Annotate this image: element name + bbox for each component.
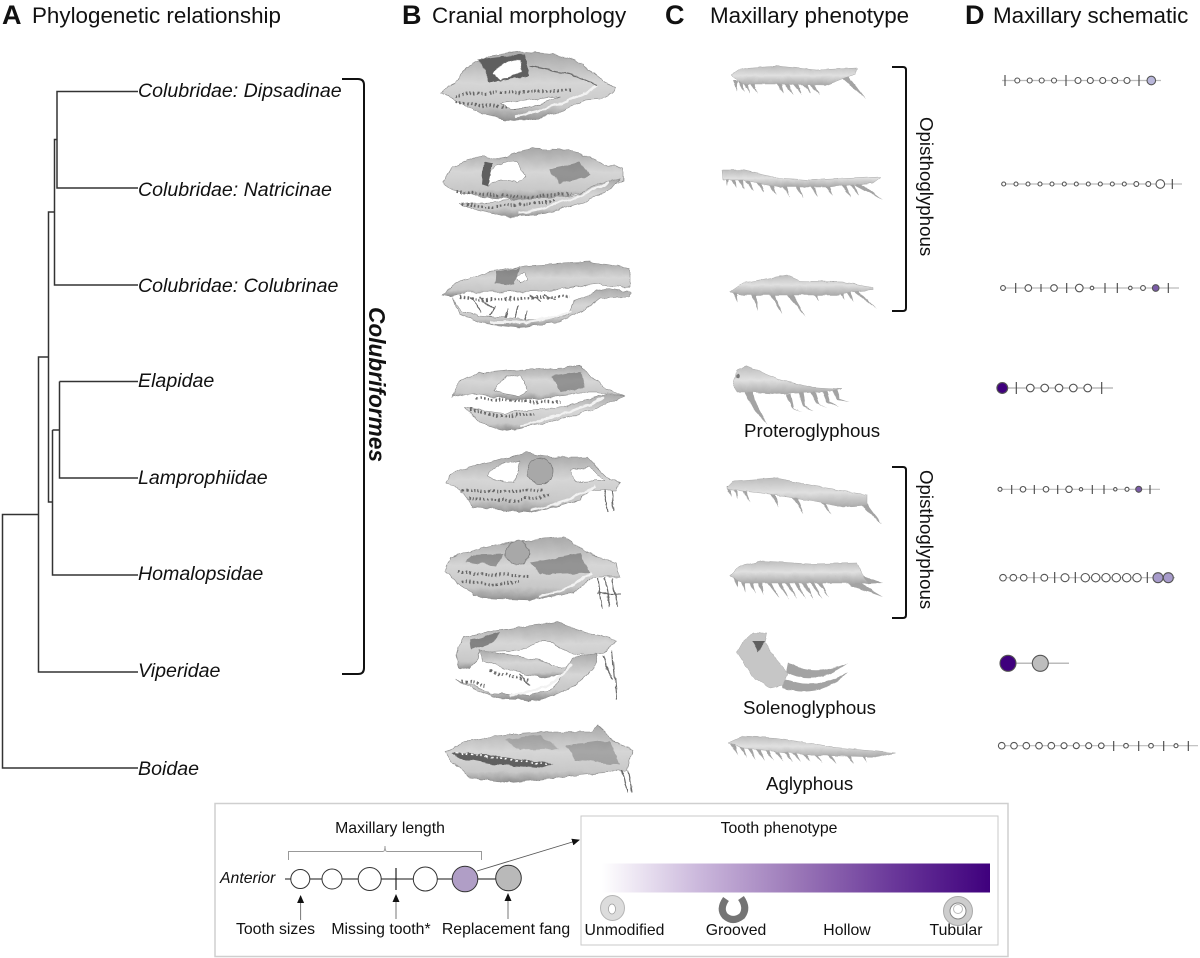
bracket: Colubriformes: [342, 79, 364, 674]
heading B: B: [402, 0, 422, 30]
maxilla: Viperidae: [737, 633, 848, 692]
heading B: Cranial morphology: [432, 3, 627, 28]
panel D: maxillary schematic: [965, 0, 1198, 751]
bracket: Opisthoglyphous upper: [892, 67, 906, 311]
panel B: cranial morphology: [402, 0, 633, 792]
example schematic: [285, 865, 521, 892]
skull: Lamprophiidae: [445, 453, 620, 513]
arrow: missing tooth: [395, 895, 397, 919]
icon: grooved tooth: [722, 898, 745, 920]
bracket: Opisthoglyphous lower: [892, 467, 906, 618]
skull: Viperidae: [455, 622, 617, 700]
brace: Maxillary length: [288, 846, 482, 860]
arrow: replacement fang: [507, 894, 509, 919]
label: Tooth sizes: Tooth sizes: [236, 921, 315, 938]
legend panel: [215, 804, 1008, 956]
label: Opisthoglyphous lower: Opisthoglyphous: [916, 470, 937, 609]
schematic: Boidae: [998, 741, 1198, 751]
schematic: Viperidae: [1000, 655, 1069, 671]
label: Missing tooth: Missing tooth*: [331, 921, 431, 938]
arrow: tooth sizes: [300, 896, 302, 920]
skull: Natricinae: [442, 149, 623, 217]
panel A: phylogenetic relationship: [2, 0, 390, 780]
maxilla: Boidae: [728, 736, 895, 764]
label: Hollow: Hollow: [823, 922, 871, 939]
skull: Dipsadinae: [441, 52, 615, 120]
label: Grooved: Grooved: [706, 922, 766, 939]
legend frame: [215, 804, 1008, 956]
icon: unmodified tooth: [600, 896, 624, 920]
Colubriformes label: Colubriformes: [364, 307, 390, 462]
maxilla: Elapidae: [733, 366, 849, 425]
label: Solenoglyphous: Solenoglyphous: [743, 697, 876, 718]
taxon labels: Homalopsidae: [138, 563, 263, 585]
icon: tubular tooth: [944, 896, 972, 926]
schematic: Homalopsidae: [999, 572, 1175, 583]
maxilla: Colubrinae: [730, 275, 877, 317]
label: Opisthoglyphous upper: Opisthoglyphous: [916, 117, 937, 256]
heading C: Maxillary phenotype: [710, 3, 909, 28]
taxon labels: Colubridae: Colubrinae: [138, 275, 339, 297]
schematic: Dipsadinae: [1002, 75, 1161, 86]
arrow to tooth phenotype: [477, 840, 579, 871]
phylogenetic tree: [2, 92, 138, 768]
maxilla: Natricinae: [722, 170, 883, 200]
schematic: Lamprophiidae: [998, 485, 1160, 494]
maxilla: Dipsadinae: [731, 66, 866, 99]
maxilla: Homalopsidae: [730, 561, 883, 600]
taxon labels: [138, 80, 342, 780]
label: Tooth phenotype: Tooth phenotype: [721, 820, 838, 837]
taxon labels: Colubridae: Dipsadinae: [138, 80, 342, 102]
heading D: Maxillary schematic: [993, 3, 1188, 28]
label: Unmodified: Unmodified: [585, 922, 664, 939]
taxon labels: Elapidae: [138, 370, 214, 392]
panel C: maxillary phenotype: [665, 0, 937, 794]
heading C: C: [665, 0, 684, 30]
skull: Homalopsidae: [445, 537, 620, 607]
taxon labels: Colubridae: Natricinae: [138, 179, 332, 201]
label: Tubular: Tubular: [930, 922, 982, 939]
heading D: D: [965, 0, 984, 30]
schematic: Colubrinae: [1000, 283, 1179, 293]
maxilla: Lamprophiidae: [726, 478, 882, 524]
label: Proteroglyphous: Proteroglyphous: [744, 420, 880, 441]
label: Anterior: Anterior: [219, 870, 276, 887]
label: Aglyphous: Aglyphous: [766, 773, 853, 794]
label: Replacement fang: Replacement fang: [442, 921, 570, 938]
schematic: Elapidae: [997, 382, 1113, 394]
tooth phenotype box: [581, 816, 998, 945]
taxon labels: Boidae: [138, 758, 199, 780]
taxon labels: Viperidae: [138, 660, 221, 682]
gradient bar: [602, 864, 990, 892]
skull: Colubrinae: [442, 262, 630, 327]
skull: Elapidae: [452, 365, 625, 431]
schematic: Natricinae: [1002, 179, 1182, 189]
skull: Boidae: [445, 725, 633, 792]
heading C: [665, 0, 909, 30]
taxon labels: Lamprophiidae: [138, 467, 268, 489]
label: Maxillary length: Maxillary length: [335, 820, 445, 837]
heading A: Phylogenetic relationship: [32, 3, 281, 28]
heading A: A: [2, 0, 22, 30]
